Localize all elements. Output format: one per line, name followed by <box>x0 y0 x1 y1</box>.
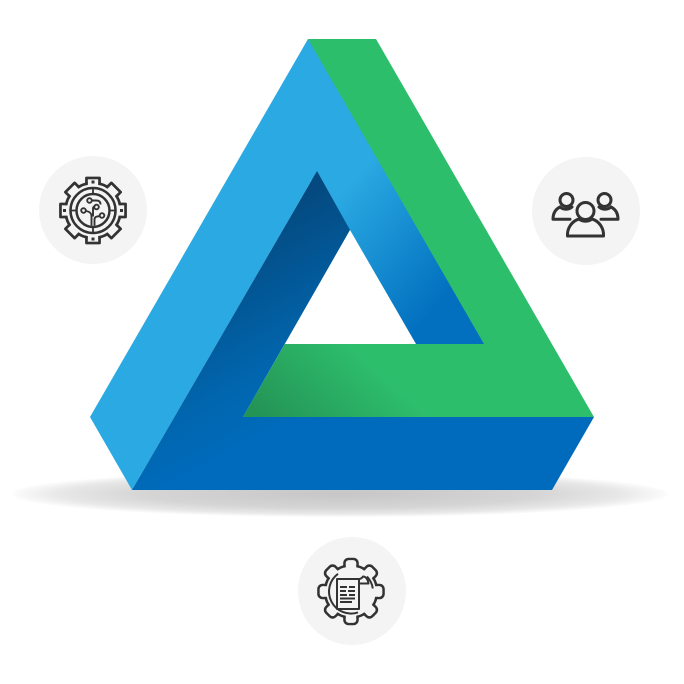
panel: left gear badge <box>39 156 147 264</box>
panel: right people badge <box>532 157 640 265</box>
dark blue base band <box>132 171 594 490</box>
document text lines <box>340 587 355 602</box>
panel: bottom document gear badge <box>298 537 406 645</box>
green right face <box>243 39 594 417</box>
light blue left face <box>90 39 317 490</box>
impossible triangle <box>90 39 594 490</box>
icon: group of people <box>553 194 618 236</box>
right blue inner face <box>300 39 495 344</box>
green shaded corner <box>243 344 430 417</box>
icon: document gear <box>318 559 384 624</box>
ground shadow <box>12 471 668 517</box>
document sheet <box>337 576 368 609</box>
badge circle <box>39 156 147 264</box>
badge circle <box>298 537 406 645</box>
icon: circuit gear <box>60 178 126 243</box>
badge circle <box>532 157 640 265</box>
